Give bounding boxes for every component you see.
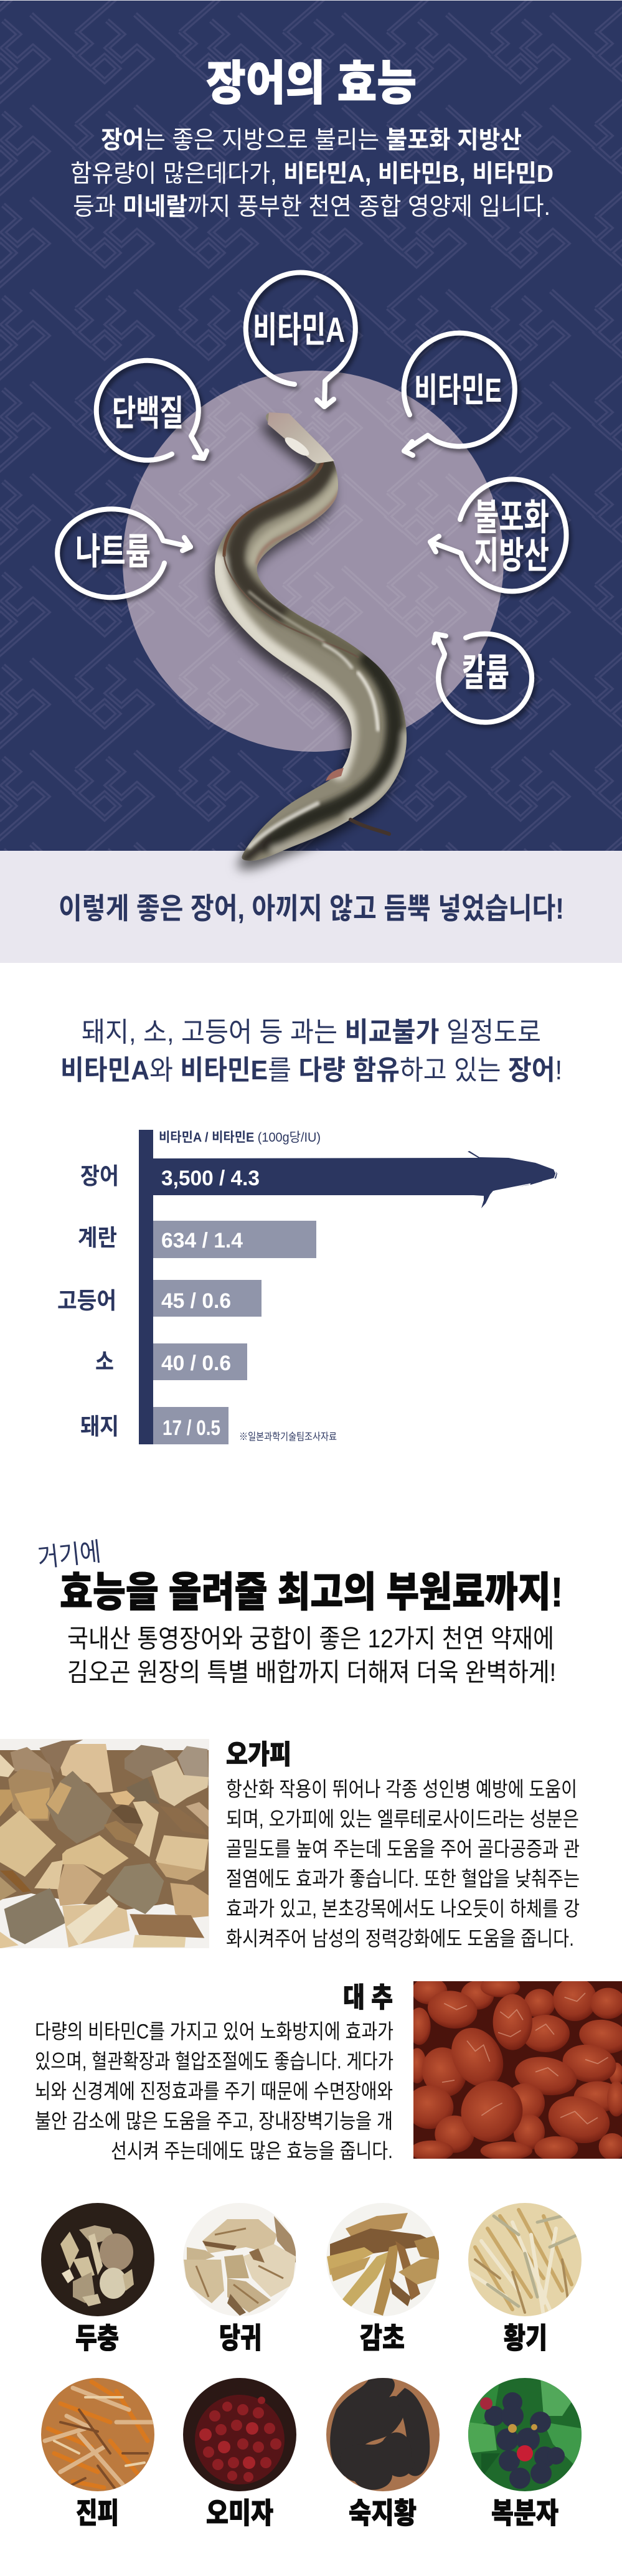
bubble: 단백질: [97, 361, 207, 460]
bubble: 불포화 지방산: 불포화: [474, 497, 549, 538]
herb: 오미자: [183, 2378, 296, 2529]
bottom tagline band: 이렇게 좋은 장어, 아끼지 않고 듬뿍 넣었습니다!: [59, 892, 564, 925]
bar: 장어 eel-shaped: 3,500 / 4.3: [161, 1167, 260, 1190]
bottom tagline band: [0, 851, 622, 963]
eel pectoral fin: [326, 768, 344, 781]
illustration: eel: [215, 412, 407, 861]
sub heading: 국내산 통영장어와 궁합이 좋은 12가지 천연 약재에: [67, 1624, 554, 1653]
대추 description: [35, 1982, 393, 2162]
대추 description: 선시켜 주는데에도 많은 효능을 줍니다.: [111, 2139, 393, 2162]
herb: 감초: [326, 2203, 440, 2354]
chart heading: 비타민A와 비타민E를 다량 함유하고 있는 장어!: [60, 1055, 562, 1086]
eel ventral barb: [351, 820, 389, 834]
purple circle behind eel: [123, 371, 504, 752]
label 감초: 감초: [360, 2322, 405, 2354]
category labels: 계란: [78, 1225, 117, 1251]
label 숙지황: 숙지황: [349, 2497, 417, 2529]
오가피 description: 되며, 오가피에 있는 엘루테로사이드라는 성분은: [226, 1807, 579, 1830]
category labels: 고등어: [57, 1288, 116, 1314]
panel: navy hero background: [0, 0, 622, 851]
대추 description: 불안 감소에 많은 도움을 주고, 장내장벽기능을 개: [35, 2110, 393, 2133]
label 두충: 두충: [75, 2322, 119, 2354]
오가피 heading: 오가피: [226, 1740, 291, 1770]
bubble: 비타민A: [246, 273, 356, 407]
label 진피: 진피: [76, 2497, 119, 2529]
label 당귀: 당귀: [219, 2322, 262, 2354]
sub heading: [67, 1624, 556, 1687]
대추 heading: 대 추: [343, 1982, 393, 2013]
오가피 description: 화시켜주어 남성의 정력강화에도 도움을 줍니다.: [226, 1927, 574, 1950]
bar: 돼지: 17 / 0.5: [163, 1416, 220, 1440]
chart heading: [60, 1017, 562, 1086]
intro text: 함유량이 많은데다가, 비타민A, 비타민B, 비타민D: [70, 161, 554, 187]
bubble: 비타민E: [404, 333, 515, 455]
source note: ※일본과학기술팀조사자료: [239, 1431, 337, 1442]
bar: 소: [153, 1343, 247, 1380]
bar: 돼지: [153, 1407, 229, 1444]
photo: 대추 jujubes: [406, 1976, 622, 2161]
chart heading: 돼지, 소, 고등어 등 과는 비교불가 일정도로: [82, 1017, 541, 1048]
category labels: 장어: [80, 1163, 119, 1189]
bar: 계란: 634 / 1.4: [161, 1229, 243, 1252]
bar: 계란: [153, 1221, 316, 1258]
herb: 숙지황: [326, 2375, 440, 2529]
title: 장어의 효능: [206, 57, 417, 110]
herb: 당귀: [183, 2203, 296, 2354]
herb: 황기: [468, 2203, 582, 2354]
herb: 두충: [41, 2203, 154, 2354]
chart axis: [139, 1130, 153, 1444]
bubble: 칼륨: [434, 634, 532, 722]
label 오미자: 오미자: [206, 2497, 273, 2529]
chart unit label: 비타민A / 비타민E (100g당/IU): [159, 1130, 321, 1145]
bubble: 비타민A: 비타민A: [253, 310, 345, 350]
bar: 장어 eel-shaped: [153, 1151, 557, 1208]
intro text: 등과 미네랄까지 풍부한 천연 종합 영양제 입니다.: [73, 194, 550, 220]
intro text: 장어는 좋은 지방으로 불리는 불포화 지방산: [101, 127, 522, 154]
bubble: 불포화 지방산: 지방산: [474, 535, 549, 576]
bubble: 비타민E: 비타민E: [414, 372, 502, 409]
eel tail fin: [268, 412, 334, 463]
herb: 복분자: [468, 2378, 582, 2529]
sub heading: 김오곤 원장의 특별 배합까지 더해져 더욱 완벽하게!: [67, 1658, 556, 1687]
bubble: 불포화 지방산: [430, 479, 566, 591]
대추 description: 뇌와 신경계에 진정효과를 주기 때문에 수면장애와: [35, 2080, 393, 2103]
bubble: 칼륨: 칼륨: [462, 651, 509, 694]
label 황기: 황기: [504, 2322, 547, 2354]
대추 description: 있으며, 혈관확장과 혈압조절에도 좋습니다. 게다가: [35, 2050, 393, 2073]
대추 description: 다량의 비타민C를 가지고 있어 노화방지에 효과가: [35, 2020, 393, 2043]
category labels: 소: [95, 1349, 114, 1375]
bubble: 단백질: 단백질: [112, 394, 184, 433]
bar: 소: 40 / 0.6: [161, 1352, 231, 1375]
오가피 description: [226, 1740, 580, 1950]
intro text: [70, 127, 554, 220]
photo: 오가피 wood chips: [0, 1739, 209, 1948]
bar chart: [57, 1130, 557, 1444]
handwritten accent 거기에: 거기에: [36, 1537, 102, 1573]
label 복분자: 복분자: [491, 2497, 558, 2529]
bubble: 나트륨: 나트륨: [75, 531, 151, 572]
category labels: 돼지: [80, 1414, 119, 1439]
herb: 진피: [41, 2378, 154, 2529]
bar: 고등어: [153, 1280, 262, 1317]
main heading: 효능을 올려줄 최고의 부원료까지!: [60, 1569, 563, 1615]
category labels: [57, 1163, 119, 1439]
bar: 고등어: 45 / 0.6: [161, 1289, 231, 1313]
bubble: 나트륨: [57, 509, 191, 597]
